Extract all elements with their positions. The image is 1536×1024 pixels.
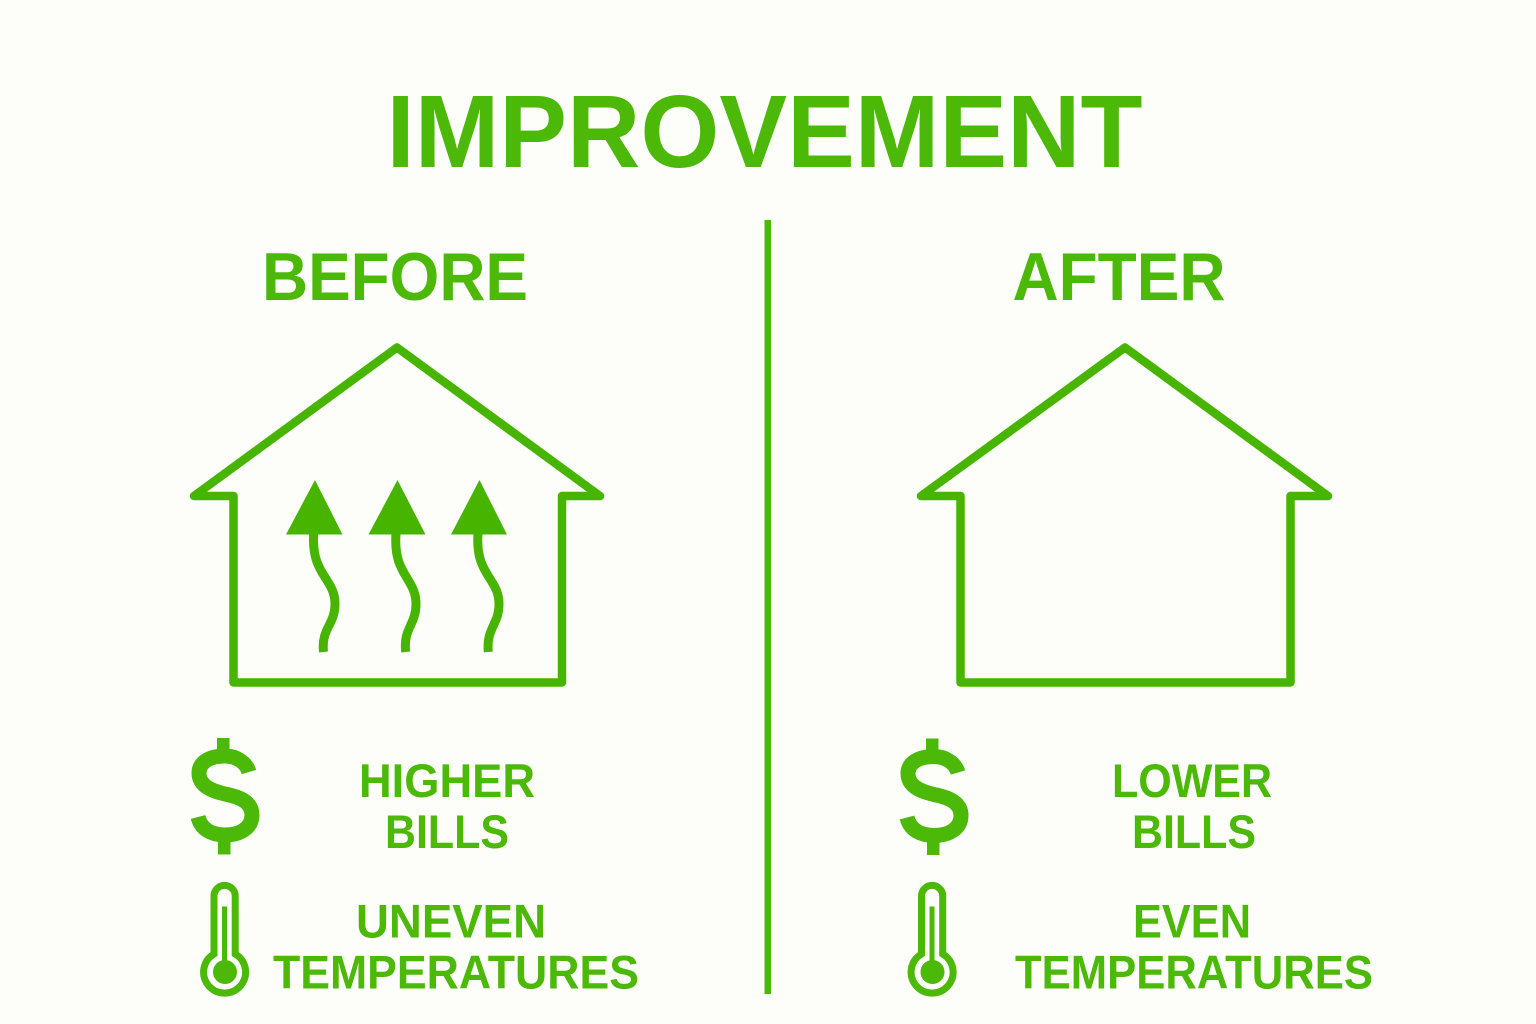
text: uneven temperatures: UNEVEN	[356, 894, 546, 948]
text: lower bills: BILLS	[1132, 805, 1256, 858]
icon: heat arrows	[286, 480, 507, 652]
text: uneven temperatures: TEMPERATURES	[273, 946, 639, 998]
text: higher bills	[359, 754, 535, 858]
icon: dollar before	[198, 738, 252, 854]
text: even temperatures: EVEN	[1133, 894, 1251, 948]
icon: thermometer before	[204, 885, 246, 993]
center divider	[764, 220, 771, 994]
icon: thermometer after	[911, 885, 953, 993]
icon: dollar after	[907, 738, 961, 855]
icon: house before	[194, 348, 600, 682]
panel: after	[907, 239, 1373, 998]
text: even temperatures	[1015, 894, 1373, 998]
text: lower bills: LOWER	[1112, 754, 1272, 807]
text: higher bills: HIGHER	[359, 754, 535, 807]
text: even temperatures: TEMPERATURES	[1015, 946, 1373, 998]
text: uneven temperatures	[273, 894, 639, 998]
text: higher bills: BILLS	[385, 805, 509, 858]
text: lower bills	[1112, 754, 1272, 858]
panel: before	[194, 239, 639, 998]
icon: house after	[921, 348, 1328, 682]
heading: after: AFTER	[1012, 239, 1226, 315]
heading: before: BEFORE	[262, 239, 528, 315]
title: IMPROVEMENT	[386, 74, 1142, 189]
